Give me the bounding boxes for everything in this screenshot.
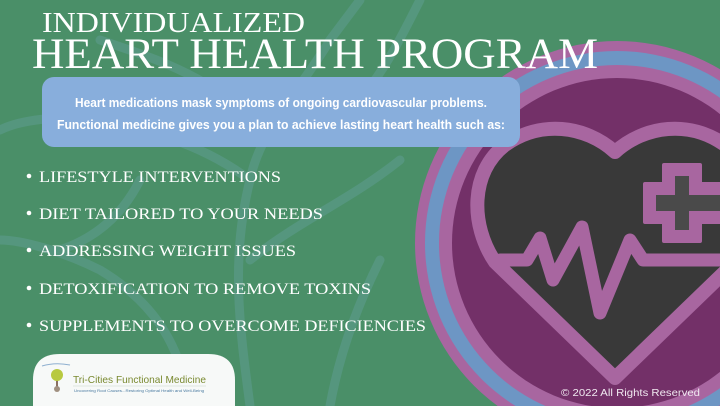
logo panel: Uncovering Root Causes...Restoring Optimal Health and Well-Being (74, 389, 204, 393)
intro text box: Heart medications mask symptoms of ongoing cardiovascular problems. (75, 95, 487, 110)
bullet list: LIFESTYLE INTERVENTIONS (39, 169, 281, 186)
bullet list: SUPPLEMENTS TO OVERCOME DEFICIENCIES (39, 318, 426, 335)
title: INDIVIDUALIZED (42, 7, 305, 39)
title: HEART HEALTH PROGRAM (32, 31, 598, 78)
logo panel (33, 354, 235, 406)
icon: cross (645, 165, 720, 241)
circles with heart icon (415, 41, 720, 406)
icon: tree (51, 369, 63, 392)
icon: heart (477, 129, 720, 378)
bullet list: ADDRESSING WEIGHT ISSUES (39, 243, 296, 260)
icon: ecg line (500, 227, 720, 313)
bullet list: DETOXIFICATION TO REMOVE TOXINS (39, 281, 371, 298)
bullet list: DIET TAILORED TO YOUR NEEDS (39, 206, 323, 223)
intro text box (42, 77, 520, 147)
title (32, 7, 598, 78)
intro text box: Functional medicine gives you a plan to achieve lasting heart health such as: (57, 117, 505, 132)
bullet list (27, 169, 426, 335)
logo panel: Tri-Cities Functional Medicine (73, 374, 206, 386)
copyright: © 2022 All Rights Reserved (561, 388, 700, 399)
